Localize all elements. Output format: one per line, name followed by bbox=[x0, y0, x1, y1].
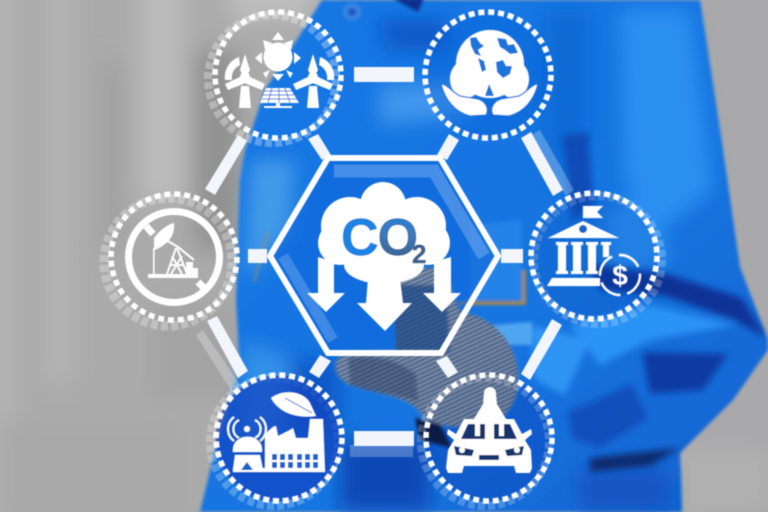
icon: cloud with down arrows bbox=[307, 182, 461, 331]
center hexagon with CO2 cloud: 2 bbox=[412, 239, 426, 269]
icon: sun wind turbines and solar panel bbox=[225, 32, 334, 108]
icon circle: earth care bbox=[425, 12, 551, 138]
photo: gloved hand pointing bbox=[336, 268, 518, 448]
text: dollar sign: $ bbox=[612, 260, 628, 291]
icon circle: green factory bbox=[210, 375, 342, 506]
text: CO2: CO bbox=[341, 209, 417, 267]
photo: blue work jacket bbox=[200, 0, 768, 512]
icon: globe in hands bbox=[441, 30, 538, 116]
icon: car with plug bbox=[446, 387, 532, 473]
icon circle: renewable energy bbox=[208, 12, 341, 143]
icon circle: green finance bbox=[531, 193, 662, 324]
connector bars between icons bbox=[196, 67, 574, 457]
center hexagon with CO2 cloud bbox=[270, 158, 498, 353]
icon: factory leaf and antenna bbox=[228, 392, 325, 472]
icon: prohibited oil pump bbox=[128, 212, 220, 302]
icon: bank with dollar cycle bbox=[547, 206, 619, 286]
icon circle: electric car bbox=[421, 375, 552, 506]
tinted backs of the hexagon and car circle bbox=[270, 158, 552, 501]
photo: pocket with orange trim bbox=[254, 220, 532, 345]
photo: collar button bbox=[343, 0, 424, 21]
icon circle: no oil bbox=[104, 194, 237, 326]
